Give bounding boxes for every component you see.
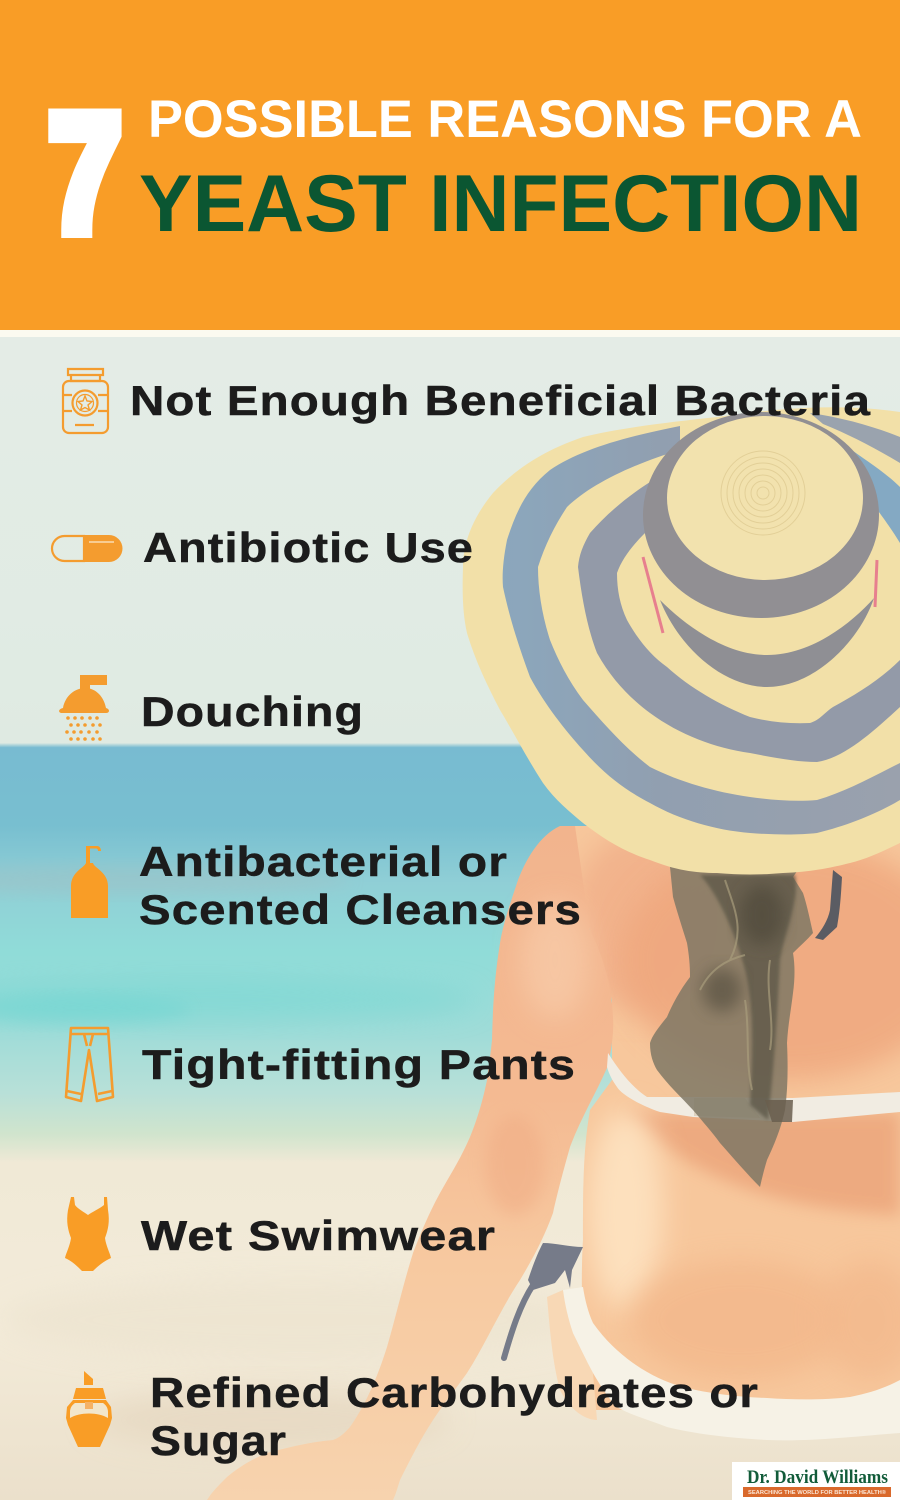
icon: pants: [66, 1028, 113, 1101]
woman: torso: [570, 826, 900, 1410]
swimsuit neck strap: [815, 870, 842, 940]
label: Not Enough Beneficial Bacteria: [130, 377, 871, 424]
label: Wet Swimwear: [141, 1212, 496, 1259]
item 1: beneficial bacteria: [63, 369, 871, 433]
sun hat: [463, 407, 900, 874]
brim stripe inner: [578, 465, 900, 762]
bikini bottom: [563, 1287, 900, 1440]
crown stripe upper: [643, 412, 879, 618]
label: Tight-fitting Pants: [142, 1041, 576, 1088]
woman: arm and hand: [207, 826, 613, 1500]
bikini rope tie: [504, 1243, 583, 1358]
item 4: cleansers: [71, 838, 582, 933]
brim stripe outer: [503, 426, 900, 834]
logo: Dr. David Williams: SEARCHING THE WORLD FOR BETTER HEALTH®: [748, 1489, 886, 1496]
crown stripe lower: [660, 598, 874, 687]
item 4: cleansers: Scented Cleansers: [139, 886, 582, 933]
heading line 2: YEAST INFECTION: [139, 159, 862, 249]
label: Antibiotic Use: [143, 524, 474, 571]
item 3: douching: [59, 675, 364, 741]
bikini top: [607, 1053, 900, 1122]
background photo: beach scene: [0, 335, 900, 1500]
pink hat ribbons: [643, 557, 663, 633]
label: Douching: [141, 688, 364, 735]
icon: probiotic jar: [63, 369, 108, 433]
logo: Dr. David Williams: [732, 1462, 900, 1500]
logo: Dr. David Williams: Dr. David Williams: [747, 1467, 888, 1488]
item 5: tight pants: [66, 1028, 576, 1101]
icon: pump bottle: [71, 846, 108, 918]
crown top: [667, 416, 863, 580]
item 7: refined carbohydrates: [66, 1369, 759, 1464]
icon: capsule: [52, 535, 122, 562]
item 6: wet swimwear: [65, 1197, 496, 1271]
icon: shower head: [59, 675, 109, 741]
icon: swimsuit: [65, 1197, 111, 1271]
label: Antibacterial or: [139, 838, 508, 885]
dark band behind hair: [765, 1100, 793, 1122]
hat brim: [463, 407, 900, 874]
woman: hair: [650, 867, 842, 1187]
label: Refined Carbohydrates or: [150, 1369, 759, 1416]
header band: [0, 0, 900, 337]
woman: back leg: [547, 1290, 597, 1420]
icon: honey jar: [66, 1371, 112, 1447]
item 7: refined carbohydrates: Sugar: [150, 1417, 287, 1464]
item 2: antibiotic use: [52, 524, 474, 571]
heading line 1: POSSIBLE REASONS FOR A: [148, 90, 862, 149]
big number 7: 7: [49, 81, 121, 265]
